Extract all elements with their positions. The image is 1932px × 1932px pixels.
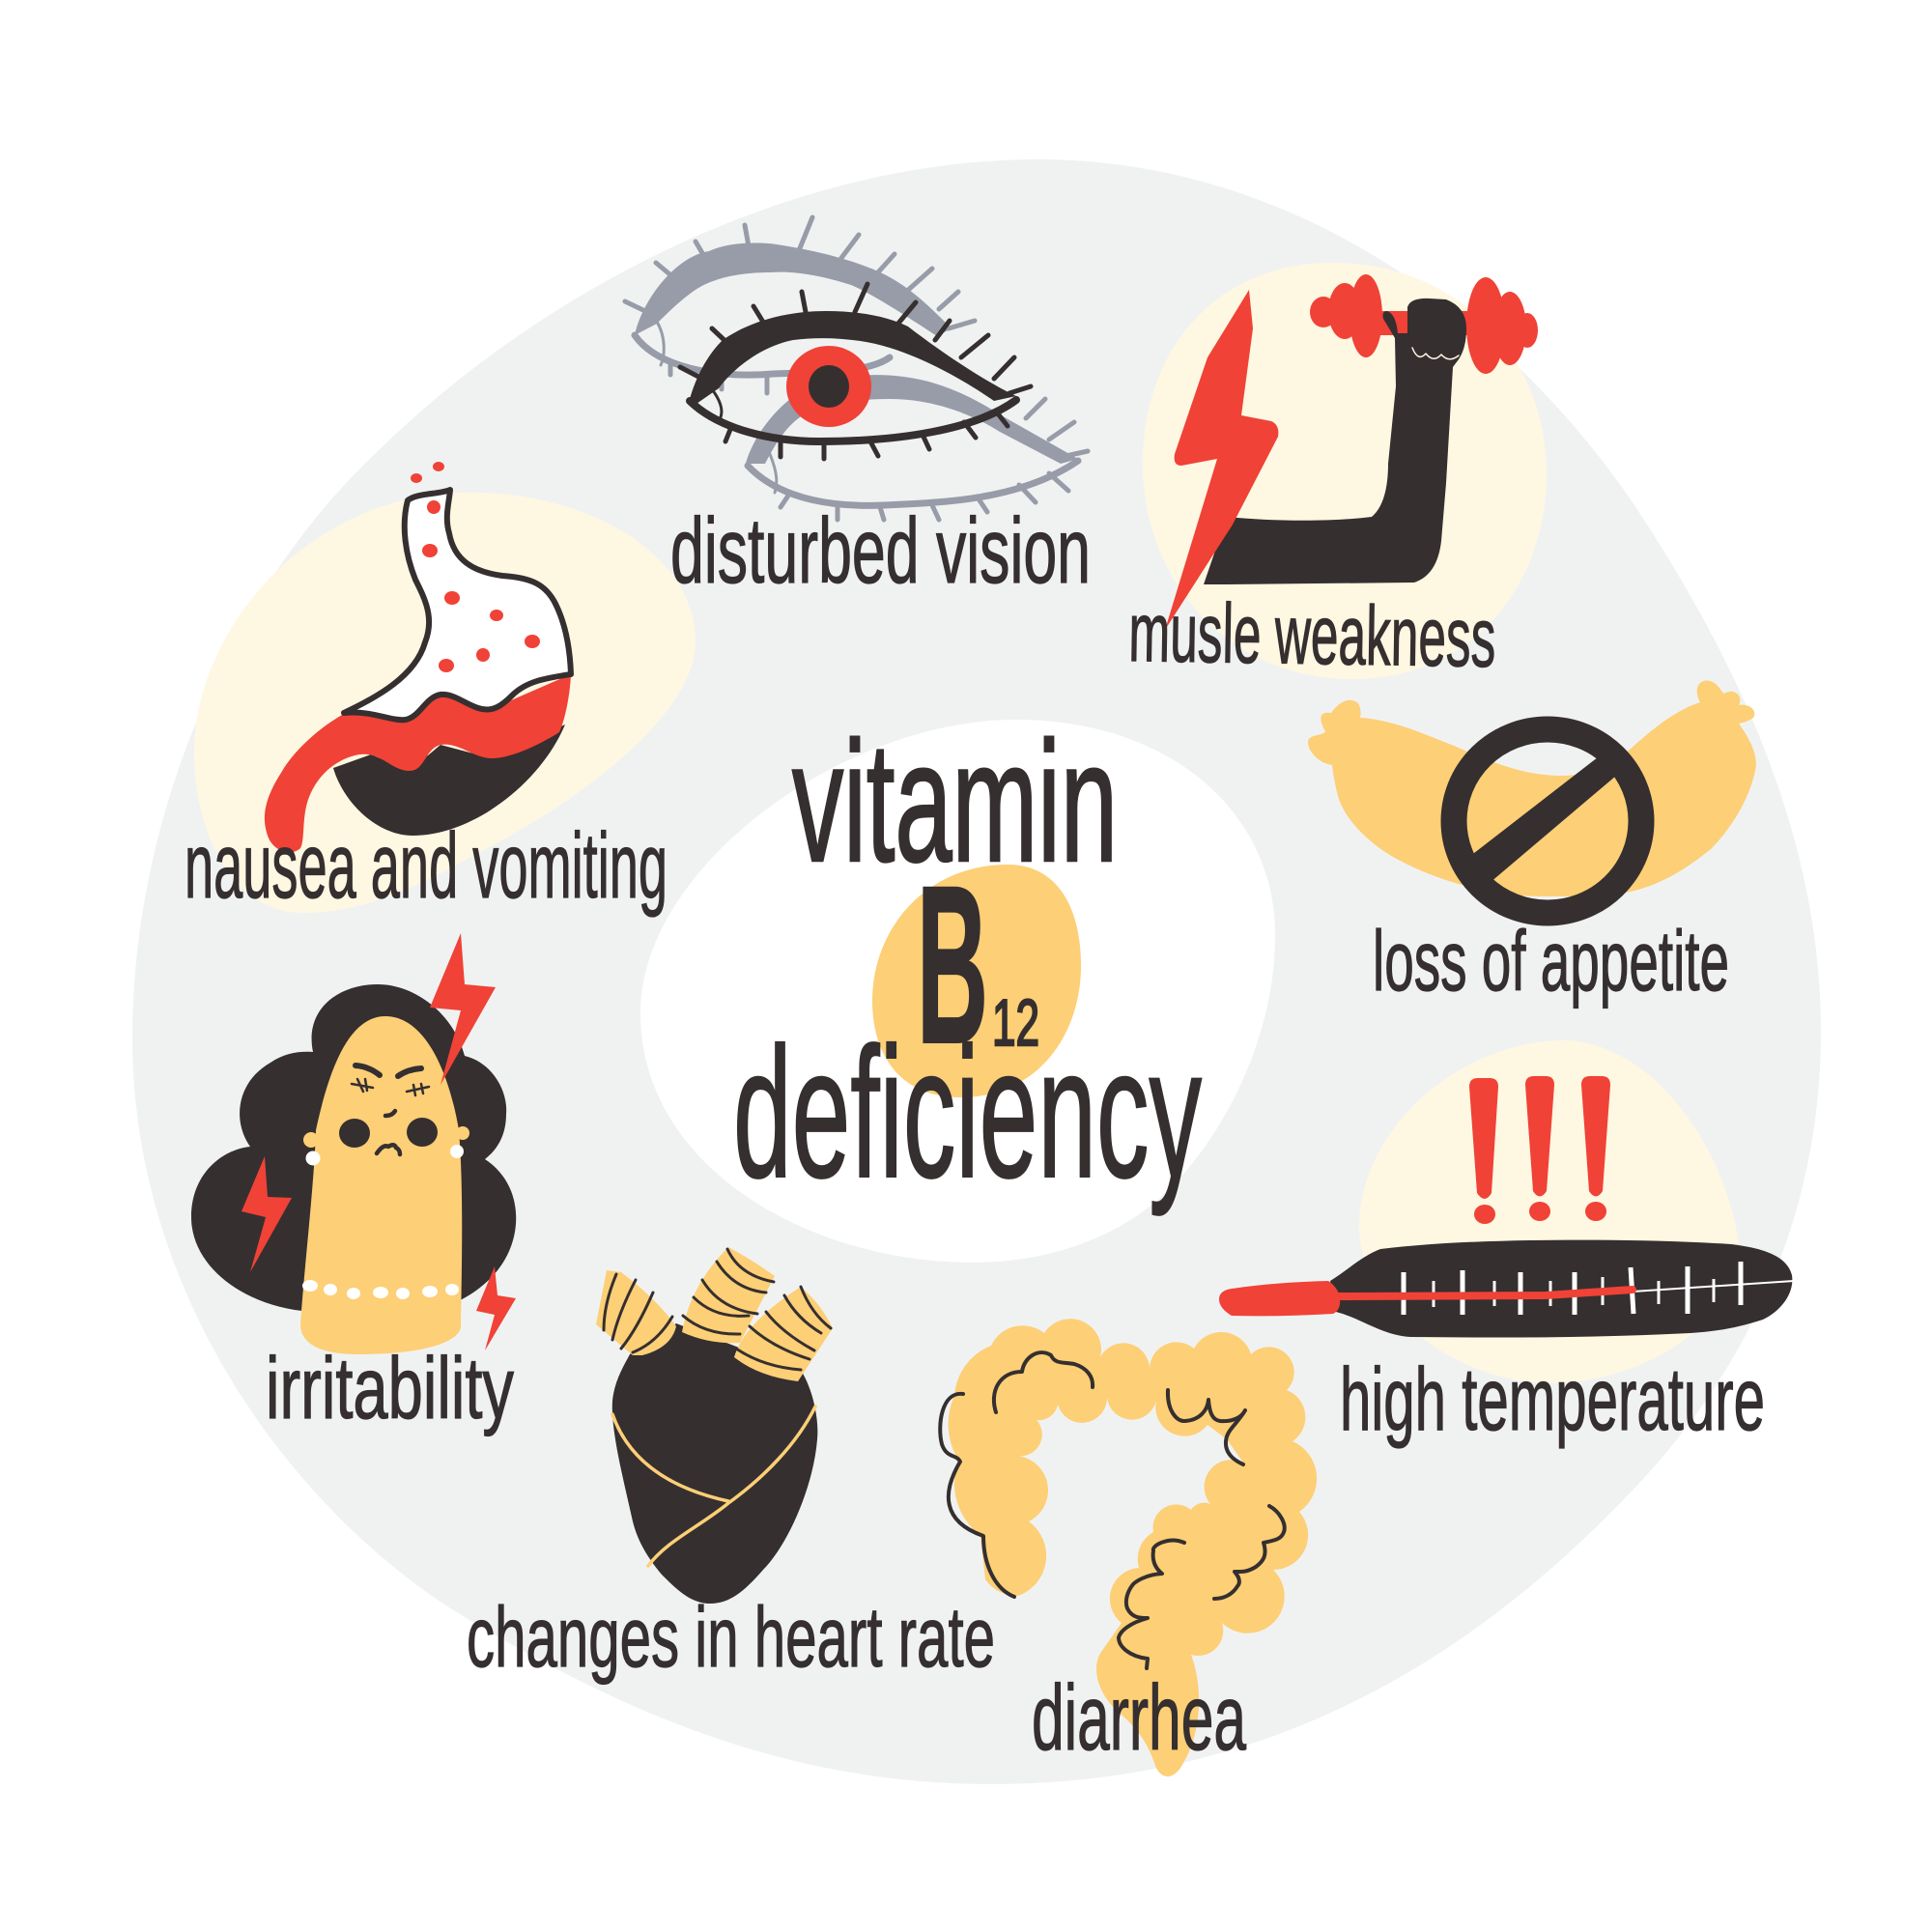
label: musle weakness: musle weakness: [1128, 585, 1496, 685]
icon: angry woman (irritability): [191, 933, 516, 1354]
eyes and lashes: [352, 1079, 429, 1095]
central white blob: [640, 720, 1275, 1263]
label: loss of appetite: loss of appetite: [1373, 913, 1729, 1009]
white scale line: [1633, 1281, 1794, 1292]
main eye lower lid: [690, 400, 1016, 441]
earrings: [305, 1151, 321, 1165]
icon: muscle backdrop: [1143, 263, 1547, 679]
prohibition slash: [1469, 757, 1616, 883]
heart body: [612, 1323, 817, 1604]
nose and mouth: [377, 1111, 400, 1154]
thermometer body: [1330, 1240, 1792, 1338]
label: irritability: irritability: [266, 1341, 514, 1437]
background blob: [132, 159, 1821, 1784]
red mercury line: [1338, 1290, 1633, 1296]
sausage: [1308, 680, 1756, 896]
intestine body: [949, 1319, 1317, 1776]
icon: exclamation marks and thermometer (high temperature): [1219, 1076, 1794, 1338]
intestine folds: [940, 1352, 1285, 1668]
right earring: [450, 1145, 464, 1158]
icon: crossed-out sausage (loss of appetite): [1308, 680, 1756, 913]
ears: [303, 1132, 319, 1148]
vessels: [596, 1247, 833, 1381]
cheeks: [339, 1119, 370, 1148]
label: disturbed vision: disturbed vision: [670, 499, 1091, 603]
icon: intestine (diarrhea): [940, 1319, 1317, 1776]
icon: heart (changes in heart rate): [596, 1247, 833, 1604]
necklace: [302, 1280, 459, 1299]
main eye pupil: [809, 365, 849, 408]
main eye lashes: [680, 284, 1031, 459]
main eye iris: [786, 346, 871, 427]
dumbbell: [1310, 274, 1538, 374]
panel: title vitamin B12 deficiency: B: [917, 839, 988, 1091]
title word: vitamin: vitamin: [792, 706, 1118, 897]
title word: deficiency: deficiency: [733, 1009, 1202, 1216]
facial features: [355, 1065, 421, 1076]
panel: title vitamin B12 deficiency: [733, 706, 1202, 1216]
blurred eye upper: [625, 217, 975, 393]
arm: [1204, 298, 1466, 584]
icon: eye (disturbed vision): [625, 217, 1088, 520]
stomach dark bottom: [333, 724, 565, 836]
label: nausea and vomiting: nausea and vomiting: [185, 814, 668, 918]
thermometer ticks: [1404, 1262, 1741, 1315]
icon: stomach (nausea and vomiting): [265, 462, 571, 852]
label: diarrhea: diarrhea: [1032, 1666, 1246, 1770]
stomach red content: [265, 674, 571, 852]
blurred eye lower: [746, 375, 1088, 520]
title subscript: 12: 12: [992, 986, 1039, 1060]
right cheek: [407, 1118, 438, 1147]
exclamation marks: [1469, 1076, 1610, 1224]
right ear: [456, 1126, 469, 1140]
main eye upper lid: [690, 311, 1016, 406]
prohibition ring: [1454, 729, 1641, 913]
coronary lines: [612, 1406, 815, 1566]
face and body: [300, 1016, 462, 1354]
fingers: [1412, 348, 1459, 359]
label: changes in heart rate: changes in heart rate: [467, 1589, 995, 1685]
B12 yellow blob: [872, 865, 1081, 1097]
lightning bolt: [1165, 290, 1278, 630]
vessel rings: [604, 1249, 831, 1370]
red bolts: [242, 933, 516, 1350]
icon: flexed arm with dumbbell (muscle weakness): [1165, 274, 1538, 630]
thermometer red tip: [1219, 1281, 1340, 1316]
icon: thermometer backdrop: [1359, 1040, 1739, 1383]
stomach white body: [344, 490, 571, 720]
stomach red dots: [411, 462, 540, 672]
icon: stomach backdrop: [194, 493, 696, 913]
hair: [191, 984, 516, 1314]
